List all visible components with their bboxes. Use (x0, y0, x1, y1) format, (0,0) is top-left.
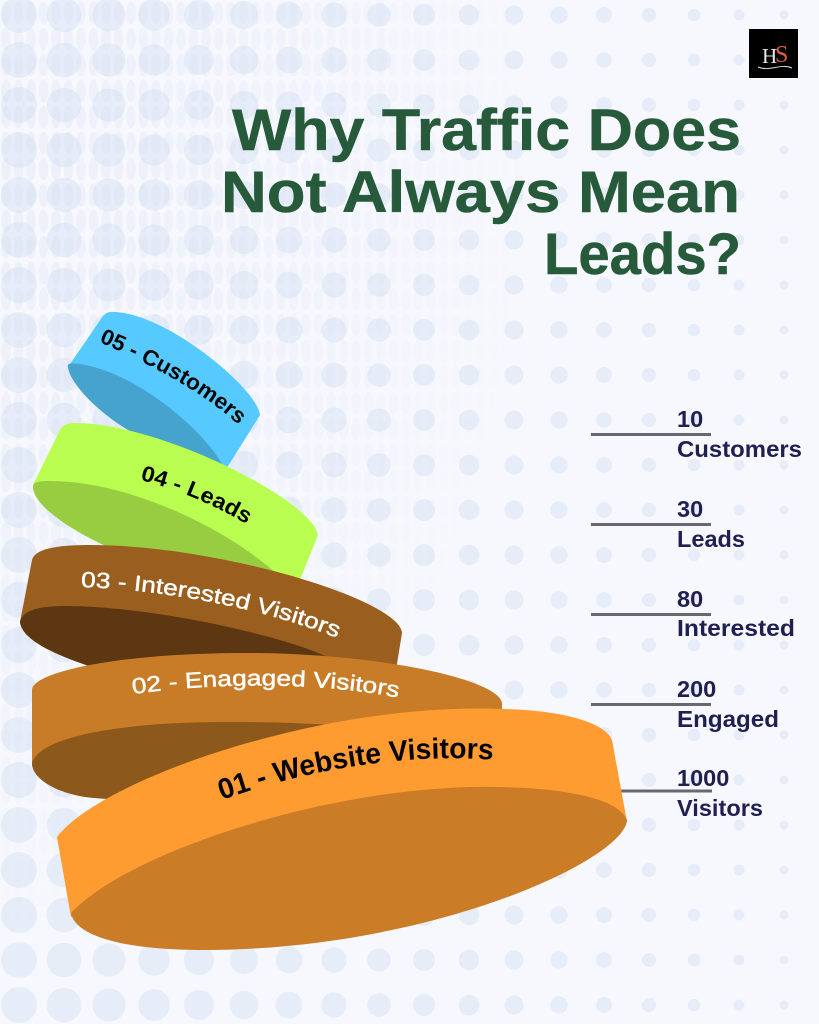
connector lines (591, 434, 712, 791)
stat: 200 engaged: 200 (677, 676, 716, 702)
stat: 30 leads (677, 496, 745, 552)
funnel disc 03: interested visitors: 03 - Interested Visitors (82, 572, 340, 637)
stat: 1000 visitors: Visitors (677, 795, 763, 821)
funnel disc 02: engaged visitors (32, 653, 502, 799)
title: Why Traffic Does (232, 98, 741, 163)
stat: 200 engaged: Engaged (677, 706, 779, 732)
funnel disc 05: customers: 05 - Customers (102, 330, 244, 423)
stat: 1000 visitors: 1000 (677, 765, 729, 791)
funnel disc 04: leads (33, 423, 318, 578)
stat: 80 interested: 80 (677, 586, 703, 612)
stat: 80 interested (677, 586, 795, 641)
stat: 10 customers (677, 406, 802, 462)
funnel disc 04: leads: 04 - Leads (142, 466, 250, 522)
logo (749, 29, 798, 78)
stat: 10 customers: 10 (677, 406, 703, 432)
logo: H (762, 44, 777, 68)
stat: 1000 visitors (677, 765, 763, 821)
stat: 30 leads: Leads (677, 526, 745, 552)
funnel disc 01: website visitors: 01 - Website Visitors (218, 738, 492, 798)
funnel disc 02: engaged visitors: 02 - Enagaged Visitors (132, 670, 399, 698)
logo: S (775, 42, 788, 68)
title (221, 98, 741, 287)
stat: 10 customers: Customers (677, 436, 802, 462)
funnel disc 05: customers (68, 312, 260, 467)
funnel disc 01: website visitors (57, 708, 627, 950)
funnel disc 03: interested visitors (20, 545, 402, 666)
title: Leads? (544, 222, 741, 287)
stat: 30 leads: 30 (677, 496, 703, 522)
stat: 200 engaged (677, 676, 779, 732)
title: Not Always Mean (221, 160, 740, 225)
stat: 80 interested: Interested (677, 615, 795, 641)
